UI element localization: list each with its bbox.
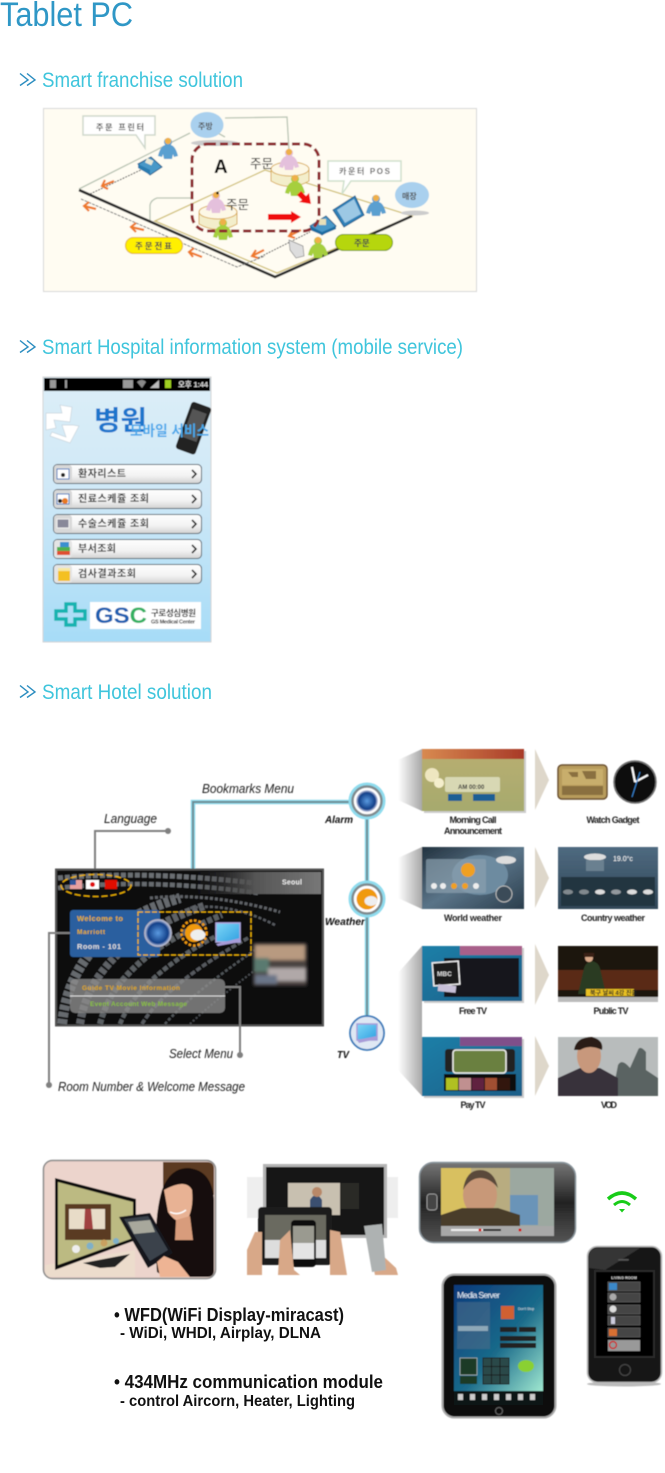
highlight: dashed area A: 주문 — [226, 198, 249, 212]
callout: kitchen: 주방 — [198, 121, 213, 131]
text block: wfd: - WiDi, WHDI, Airplay, DLNA — [120, 1325, 321, 1342]
language flags — [61, 874, 131, 896]
menu button 2: 진료스케쥴 조회 — [78, 492, 149, 505]
pattern band — [58, 875, 280, 1024]
heading: smart franchise solution: Smart franchise solution — [42, 69, 243, 92]
welcome panel: Welcome to — [77, 914, 123, 923]
thumbnail: free tv — [422, 946, 524, 1016]
icon: wifi — [608, 1193, 636, 1212]
thumbnail: watch gadget: Watch Gadget — [586, 815, 640, 825]
status bar — [44, 378, 210, 391]
thumbnail: morning call: Announcement — [444, 826, 502, 836]
bookmark icons — [138, 912, 251, 955]
callout: order printer — [83, 116, 155, 148]
icon: double chevron — [20, 686, 35, 698]
node: alarm — [324, 784, 384, 826]
menu button 1: 환자리스트 — [78, 467, 126, 480]
text block: 434mhz module: - control Aircorn, Heater, Lighting — [120, 1393, 355, 1410]
top bar — [190, 872, 321, 894]
chart: hotel solution diagram — [46, 749, 658, 1110]
arrows to detail screens — [535, 749, 549, 1096]
menu button 4: 부서조회 — [78, 542, 116, 555]
panel: franchise diagram — [44, 108, 476, 292]
thumbnail: free tv: MBC — [437, 971, 452, 978]
callout: kitchen — [190, 112, 224, 138]
device: iphone remote — [587, 1246, 662, 1386]
thumbnail: pay tv: Pay TV — [460, 1100, 486, 1110]
thumbnail: country weather: 19.0°c — [613, 855, 633, 863]
menu button 5: 검사결과조회 — [78, 567, 136, 580]
label: select menu: Select Menu — [169, 1047, 233, 1061]
thumbnail: country weather — [558, 847, 658, 923]
order label pills: 주문전표 — [135, 241, 172, 251]
highlight: dashed area A: A — [214, 157, 228, 178]
device: landscape phone — [420, 1162, 576, 1242]
menu button 2 — [54, 490, 202, 508]
text block: 434mhz module: • 434MHz communication module — [114, 1372, 383, 1392]
connector: language — [95, 831, 168, 872]
thumbnail: vod: VOD — [601, 1100, 618, 1110]
callout: order printer: 주문 프린터 — [96, 122, 144, 132]
order label pills: 주문 — [354, 238, 370, 248]
node: tv: TV — [337, 1049, 350, 1061]
app header — [46, 401, 212, 455]
connector: room number — [49, 933, 70, 1085]
icon: double chevron — [20, 74, 35, 86]
device: tablet with media server: Media Server — [457, 1290, 500, 1300]
app header: 모바일 서비스 — [130, 423, 209, 440]
thumbnail: public tv: 북구 날씨 4강 진출 — [590, 989, 637, 997]
funnels — [398, 749, 422, 1096]
thumbnail: watch gadget — [558, 761, 656, 825]
order label pills — [126, 234, 392, 254]
label: bookmarks menu: Bookmarks Menu — [202, 782, 294, 796]
thumbnail: vod — [558, 1037, 658, 1110]
photo: tv tablet and phone — [247, 1164, 398, 1275]
thumbnail: public tv — [558, 946, 658, 1016]
welcome panel: Room - 101 — [77, 942, 121, 951]
heading: smart hospital information system: Smart Hospital information system (mobile service) — [42, 336, 463, 359]
connector: alarm to weather to tv — [193, 802, 367, 1020]
app header: 병원 — [94, 406, 147, 436]
callout: counter POS: 카운터 POS — [339, 166, 391, 176]
text block: 434mhz module — [114, 1372, 383, 1410]
node: alarm: Alarm — [324, 814, 353, 826]
tv screen mockup: Seoul — [282, 880, 302, 886]
menu button 4 — [54, 540, 202, 558]
flow arrows — [84, 180, 301, 258]
thumbnail: free tv: Free TV — [459, 1006, 487, 1016]
connector dot: language — [165, 828, 171, 834]
menu button 3 — [54, 514, 202, 534]
node: tv — [337, 1016, 384, 1061]
thumbnail: world weather — [422, 847, 524, 923]
icon: kitchen printer — [138, 157, 162, 175]
panel: hospital mobile app — [43, 377, 212, 642]
shadows — [191, 140, 239, 146]
text block: wfd — [114, 1305, 344, 1342]
icon: POS terminal — [289, 196, 364, 258]
hospital logo — [56, 602, 201, 629]
tv screen mockup — [56, 870, 323, 1026]
hospital logo: GSC — [95, 603, 147, 628]
menu button 1 — [54, 464, 202, 484]
welcome panel — [70, 910, 160, 957]
hospital logo: GS Medical Center — [151, 620, 196, 626]
welcome panel: Marriott — [77, 929, 106, 936]
highlight: dashed area A: 주문 — [250, 157, 273, 171]
red arrows — [268, 191, 311, 223]
heading: smart hotel solution: Smart Hotel solution — [42, 681, 212, 704]
thumbnail: public tv: Public TV — [594, 1006, 628, 1016]
device: tablet with media server — [442, 1274, 556, 1418]
node: weather — [325, 882, 384, 928]
device: tablet with media server: Don't Stop — [518, 1307, 534, 1311]
floor plan outlines — [79, 117, 412, 277]
hospital logo: 구로성심병원 — [151, 608, 196, 618]
callout: hall — [395, 182, 429, 208]
thumbnail: country weather: Country weather — [581, 913, 645, 923]
thumbnail: pay tv — [422, 1037, 524, 1110]
thumbnail: morning call: AM 00:00 — [458, 785, 485, 791]
highlight: dashed area A — [192, 144, 319, 231]
label: room number and welcome message: Room Number & Welcome Message — [58, 1080, 245, 1094]
connector dots — [46, 1052, 243, 1088]
device: iphone remote: LIVING ROOM — [611, 1276, 637, 1280]
thumbnail: morning call: Morning Call — [450, 815, 496, 825]
text block: wfd: • WFD(WiFi Display-miracast) — [114, 1305, 344, 1325]
status bar: 오후 1:44 — [178, 379, 209, 389]
menu panel: Guide TV Movie Information — [82, 985, 180, 992]
callout: counter POS — [328, 161, 401, 194]
icon: double chevron — [20, 340, 35, 352]
label: language: Language — [104, 812, 157, 826]
thumbnail: world weather: World weather — [444, 913, 502, 923]
tables and people — [158, 138, 386, 258]
node: weather: Weather — [325, 916, 366, 928]
menu panel — [70, 979, 225, 1013]
menu button 5 — [54, 564, 202, 584]
menu button 3: 수술스케쥴 조회 — [78, 517, 149, 530]
menu panel: Event Account Web Message — [90, 1001, 187, 1008]
hotel room photo — [253, 943, 307, 986]
callout: hall: 매장 — [402, 191, 417, 201]
thumbnail: morning call — [422, 749, 526, 836]
photo: woman with tablet and tv — [44, 1160, 216, 1278]
connector: select menu — [225, 987, 240, 1055]
